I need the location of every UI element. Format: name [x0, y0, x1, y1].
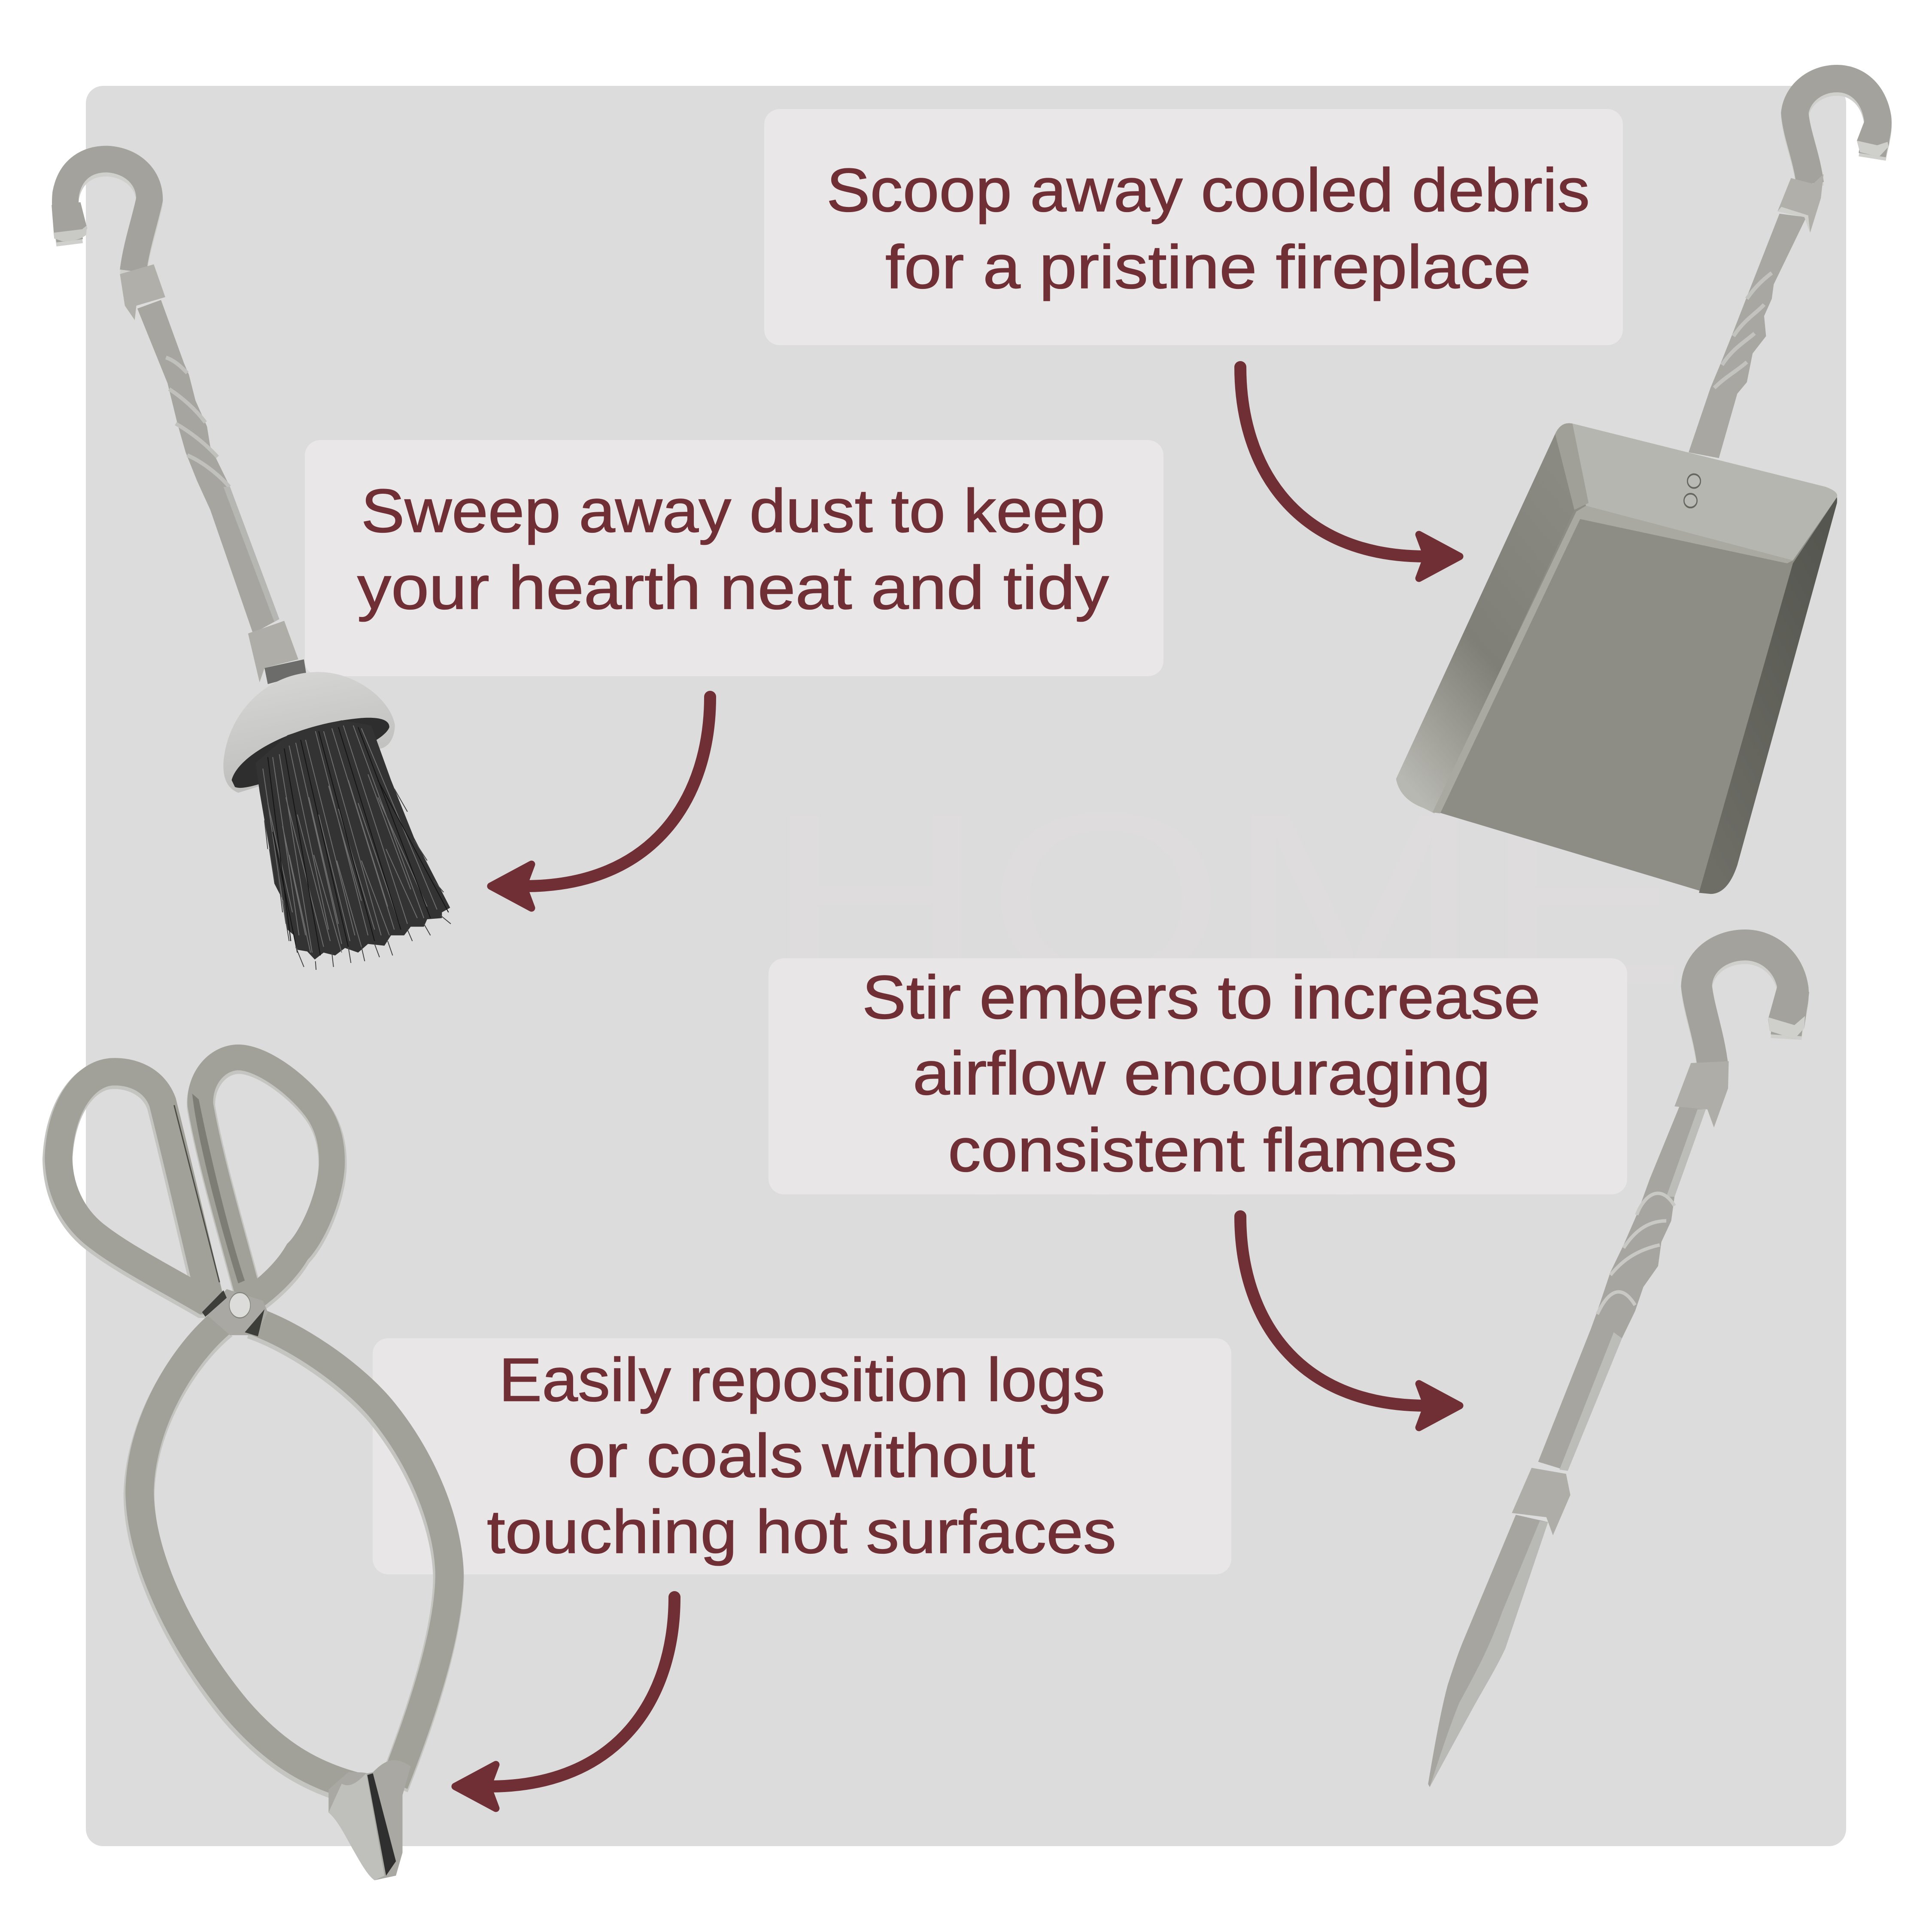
- brush dome: [223, 672, 395, 793]
- shovel screws: [1684, 474, 1701, 507]
- shovel pan: [1396, 423, 1837, 894]
- tongs serrated teeth: [368, 1773, 396, 1876]
- callout: brush: your hearth neat and tidy: [357, 554, 1109, 622]
- poker upper collar: [1674, 1061, 1729, 1127]
- tongs pivot: [202, 1289, 268, 1337]
- arrow: to brush: [491, 697, 710, 908]
- shovel collar: [1777, 174, 1823, 233]
- callout: poker: airflow encouraging: [913, 1039, 1491, 1108]
- callout: tongs: [373, 1338, 1231, 1574]
- callout: brush: Sweep away dust to keep: [361, 477, 1105, 545]
- brush shaft: [137, 300, 279, 633]
- brush hair strands: [263, 726, 451, 970]
- brush lower collar: [248, 621, 298, 682]
- brush underside: [232, 718, 389, 788]
- tool: ash shovel: [1396, 79, 1891, 894]
- callout: shovel: for a pristine fireplace: [885, 233, 1531, 301]
- tool: hearth brush: [52, 159, 451, 970]
- poker lower collar: [1512, 1468, 1571, 1535]
- brush hook: [52, 159, 149, 275]
- shovel back flange: [1573, 424, 1837, 560]
- callout: poker: Stir embers to increase: [862, 963, 1540, 1032]
- callout: tongs: touching hot surfaces: [487, 1498, 1116, 1566]
- tool: poker: [1428, 945, 1809, 1787]
- tongs grip tip: [328, 1760, 411, 1880]
- shovel right wall: [1699, 497, 1837, 894]
- shovel handle shaft: [1689, 214, 1806, 458]
- callout: tongs: or coals without: [568, 1422, 1035, 1490]
- poker hook: [1697, 945, 1809, 1071]
- brush dark ring: [264, 659, 306, 684]
- tongs left handle loop: [58, 1072, 219, 1303]
- brush upper collar: [120, 264, 165, 320]
- tongs right handle loop: [192, 1057, 333, 1303]
- callout: tongs: Easily reposition logs: [499, 1346, 1105, 1414]
- callout: shovel: [764, 109, 1623, 345]
- arrow: to tongs: [455, 1597, 674, 1808]
- watermark: HOME: [764, 762, 1687, 1035]
- callout: shovel: Scoop away cooled debris: [826, 156, 1590, 225]
- shovel hook: [1795, 79, 1891, 187]
- tongs grip loop: [139, 1321, 450, 1793]
- callout: brush: [305, 440, 1163, 676]
- arrow: to shovel: [1240, 367, 1460, 578]
- watermark: DISCOUNT: [764, 1027, 1623, 1233]
- brush bristles: [255, 720, 450, 960]
- callout: poker: [769, 958, 1627, 1194]
- poker shaft: [1538, 1106, 1706, 1471]
- watermark: [275, 762, 1687, 1245]
- shovel left wall: [1396, 434, 1574, 814]
- tool: tongs: [58, 1057, 450, 1880]
- arrow: to poker: [1240, 1216, 1460, 1428]
- poker point: [1428, 1515, 1548, 1787]
- callout: poker: consistent flames: [948, 1116, 1457, 1185]
